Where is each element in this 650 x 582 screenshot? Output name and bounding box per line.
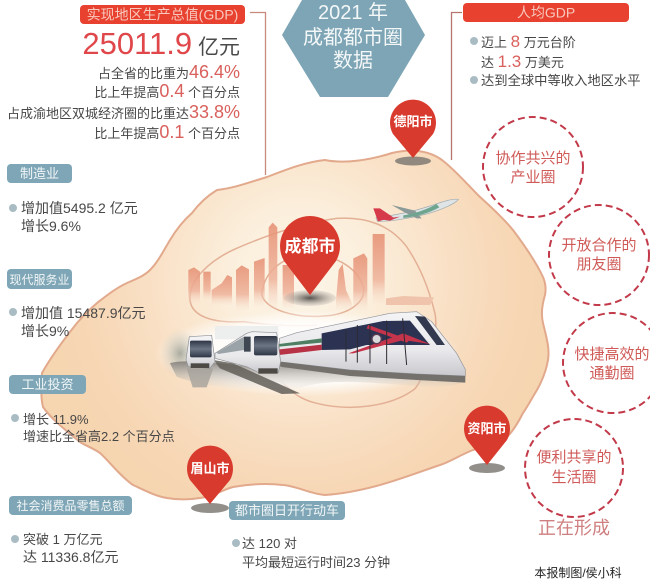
GDP shares: 比上年提高0.4 个百分点 [94, 81, 240, 101]
panel: manufacturing [7, 164, 138, 234]
panel: retail sales: 达 11336.8亿元 [23, 549, 118, 565]
credit: 本报制图/侯小科 [534, 565, 622, 580]
heading: per-capita GDP: 人均GDP [517, 4, 575, 20]
panel: daily trains: 达 120 对 [242, 536, 297, 551]
circle: industry: 产业圈 [510, 169, 556, 186]
metro train, middle [215, 332, 281, 374]
circle: commuting: 通勤圈 [589, 365, 635, 382]
panel: daily trains [229, 501, 390, 570]
panel: modern services [7, 269, 146, 339]
GDP shares: 占成渝地区双城经济圈的比重达33.8% [7, 102, 240, 122]
connector: per-capita GDP [452, 12, 462, 160]
circle: industry: 协作共兴的 [495, 150, 571, 167]
illustration: metro and high-speed trains [153, 310, 465, 397]
icon: airplane [373, 199, 458, 221]
pin: Meishan: 眉山市 [190, 461, 230, 476]
circle: living: 便利共享的 [536, 449, 612, 466]
GDP shares: 比上年提高0.1 个百分点 [94, 122, 240, 142]
panel: retail sales [9, 496, 132, 565]
circle: commuting [563, 313, 650, 413]
circle: friends [549, 205, 649, 305]
title hexagon [282, 0, 425, 97]
pin: Ziyang [464, 406, 510, 473]
title hexagon: 数据 [333, 49, 373, 72]
panel: retail sales: 社会消费品零售总额 [16, 498, 125, 513]
panel: manufacturing: 制造业 [20, 166, 59, 181]
circle: industry [483, 117, 583, 217]
panel: per-capita GDP: 迈上 8 万元台阶 [481, 32, 576, 51]
GDP shares: 占全省的比重为46.4% [98, 62, 240, 82]
panel: modern services: 增长9% [21, 323, 69, 339]
GDP shares [7, 62, 240, 142]
panel: per-capita GDP: 达到全球中等收入地区水平 [481, 72, 641, 88]
title hexagon: 成都都市圈 [303, 26, 403, 49]
panel: industrial investment [9, 375, 175, 444]
text: taking shape: 正在形成 [538, 518, 610, 538]
circle: living [525, 419, 623, 517]
panel: industrial investment: 增速比全省高2.2 个百分点 [23, 429, 175, 444]
panel: modern services: 现代服务业 [9, 272, 70, 287]
panel: retail sales: 突破 1 万亿元 [23, 532, 102, 547]
panel: per-capita GDP: 达 1.3 万美元 [481, 52, 564, 71]
panel: daily trains: 都市圈日开行动车 [235, 503, 339, 518]
heading: per-capita GDP [463, 3, 629, 22]
panel: modern services: 增加值 15487.9亿元 [21, 305, 146, 321]
illustration: city skyline [188, 223, 434, 310]
heading: GDP: 实现地区生产总值(GDP) [87, 6, 238, 22]
metro train, left [186, 335, 215, 368]
connector: GDP [250, 12, 266, 175]
pin: Chengdu [280, 216, 340, 306]
circle: friends: 朋友圈 [576, 256, 622, 273]
title hexagon: 2021 年 [318, 1, 388, 24]
circle: commuting: 快捷高效的 [574, 346, 650, 363]
panel: GDP [7, 5, 245, 142]
circle: friends: 开放合作的 [561, 237, 637, 254]
circle: living: 生活圈 [551, 469, 597, 486]
panel: industrial investment: 增长 11.9% [23, 412, 89, 427]
contour lines around Chengdu [190, 218, 436, 407]
panel: per-capita GDP [463, 3, 641, 88]
pin: Meishan [187, 446, 233, 513]
large red and navy train [279, 312, 465, 383]
pin: Ziyang: 资阳市 [467, 421, 507, 436]
pin: Chengdu: 成都市 [284, 236, 336, 256]
map: Chengdu metropolitan area outline [41, 151, 549, 500]
panel: daily trains: 平均最短运行时间23 分钟 [242, 555, 390, 570]
panel: industrial investment: 工业投资 [21, 377, 74, 392]
pin: Deyang [390, 100, 436, 166]
panel: manufacturing: 增加值5495.2 亿元 [21, 200, 138, 216]
pin: Deyang: 德阳市 [393, 114, 433, 129]
GDP total: 25011.9 亿元 [82, 26, 240, 61]
panel: manufacturing: 增长9.6% [21, 218, 81, 234]
